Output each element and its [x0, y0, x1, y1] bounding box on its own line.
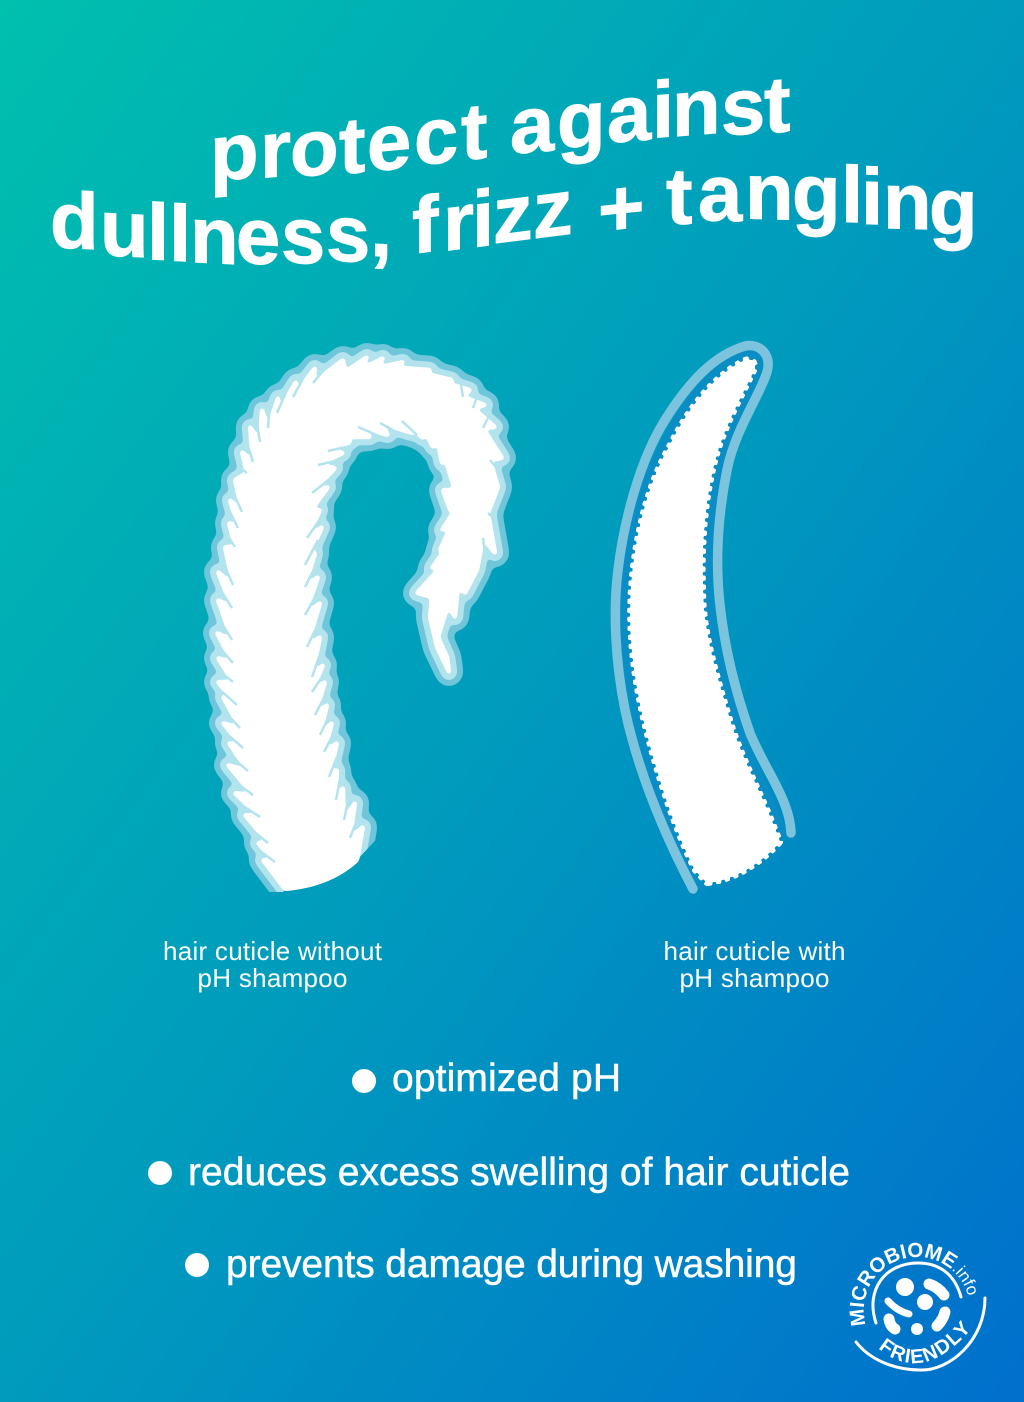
- title: [50, 55, 978, 289]
- logo: microbiome friendly badge: MICROBIOME.info: [849, 1242, 976, 1326]
- title: protect: [210, 84, 487, 203]
- logo: microbiome friendly badge: [849, 1242, 986, 1372]
- hair cuticle illustration: with pH shampoo: [615, 346, 791, 889]
- title: against: [510, 55, 790, 171]
- title: +: [598, 161, 644, 254]
- caption: without pH shampoo: hair cuticle without: [163, 936, 383, 966]
- logo: microbiome friendly badge: FRIENDLY: [879, 1320, 968, 1364]
- title: frizz: [412, 161, 573, 272]
- caption: with pH shampoo: pH shampoo: [680, 963, 830, 993]
- bullet: reduces swelling: reduces excess swelling of hair cuticle: [188, 1151, 850, 1194]
- bullet: optimized pH: optimized pH: [392, 1057, 621, 1100]
- title: dullness,: [50, 167, 392, 289]
- caption: without pH shampoo: pH shampoo: [198, 963, 348, 993]
- bullet: prevents damage: prevents damage during washing: [226, 1243, 797, 1286]
- hair cuticle illustration: without pH shampoo: [217, 357, 502, 889]
- caption: with pH shampoo: hair cuticle with: [664, 936, 846, 966]
- title: tangling: [666, 144, 978, 252]
